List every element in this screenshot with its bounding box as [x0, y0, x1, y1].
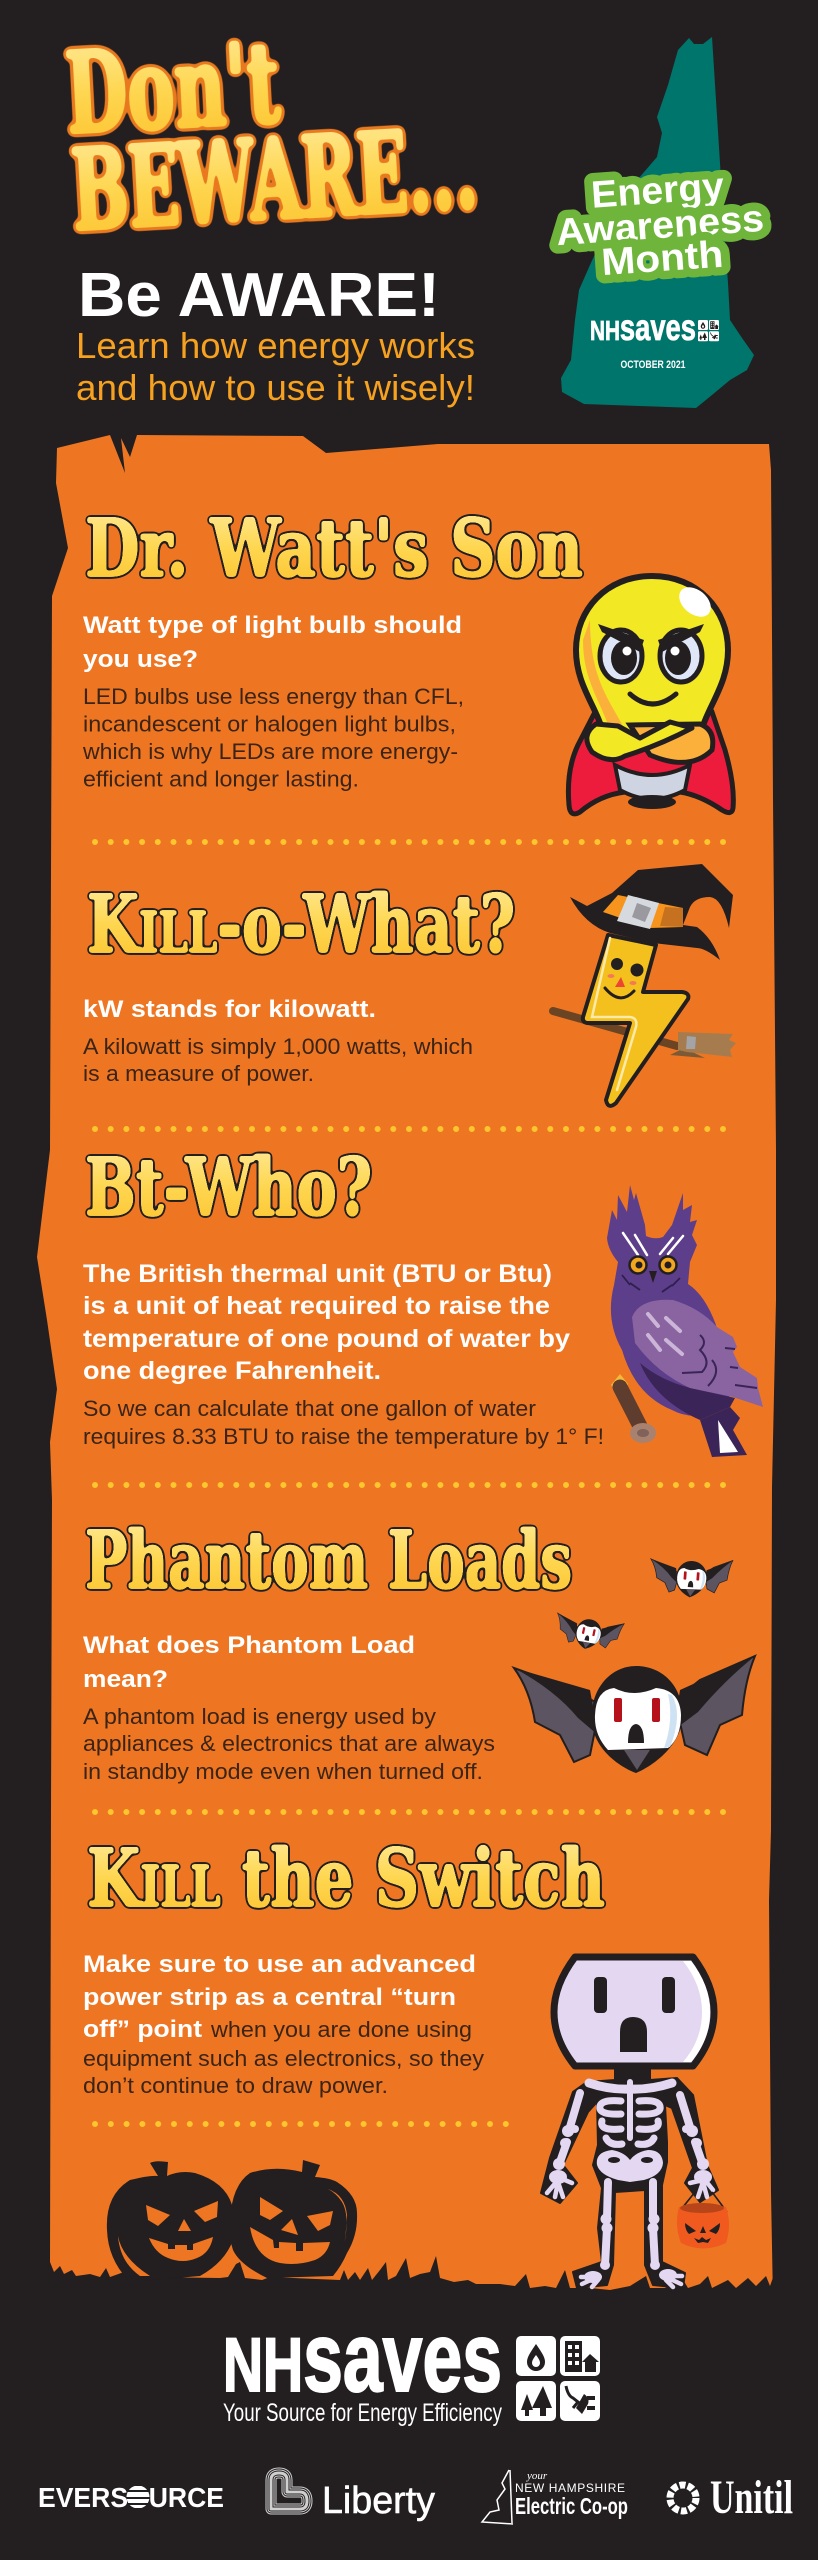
- title: Don't Beware: [63, 18, 481, 257]
- definition: one degree Fahrenheit.: [83, 1357, 381, 1385]
- heading: Phantom Loads: [85, 1513, 572, 1607]
- map: New Hampshire badge: [552, 37, 768, 408]
- section 3: Bt-Who?: [83, 1140, 763, 1457]
- advice: [83, 1951, 476, 2043]
- question: Watt type of light bulb should: [83, 612, 462, 639]
- black body: [541, 2066, 718, 2288]
- advice detail: equipment such as electronics, so they: [83, 2046, 484, 2071]
- liberty mark: [271, 2473, 307, 2509]
- icon: purple owl: [607, 1185, 763, 1457]
- left pumpkin: [107, 2161, 233, 2282]
- treat pail: [677, 2192, 729, 2248]
- date: OCTOBER 2021: [620, 359, 686, 371]
- answer: in standby mode even when turned off.: [83, 1759, 483, 1784]
- statement: kW stands for kilowatt.: [83, 996, 376, 1023]
- bone joints: [549, 2125, 712, 2283]
- logo: Unitil: [670, 2471, 793, 2524]
- energy awareness month label: Awareness: [555, 198, 765, 254]
- question: What does Phantom Load: [83, 1632, 415, 1659]
- logo: Eversource: [40, 2486, 223, 2508]
- definition: [83, 1260, 570, 1385]
- eversource wordmark: EVERSOURCE: [38, 2482, 224, 2513]
- icon: small bat right: [648, 1555, 733, 1600]
- advice: power strip as a central “turn: [83, 1984, 456, 2011]
- calculation: [83, 1396, 604, 1449]
- answer: [83, 1704, 495, 1784]
- answer: LED bulbs use less energy than CFL,: [83, 684, 464, 709]
- question: [83, 612, 462, 673]
- advice: Make sure to use an advanced: [83, 1951, 476, 1978]
- answer: A phantom load is energy used by: [83, 1704, 436, 1729]
- question: [83, 1632, 415, 1693]
- icon: large outlet bat: [514, 1656, 755, 1773]
- definition: temperature of one pound of water by: [83, 1325, 570, 1353]
- energy awareness month label: [552, 163, 768, 287]
- state outline: [482, 2470, 513, 2524]
- advice: off” point: [83, 2016, 202, 2043]
- question: mean?: [83, 1666, 168, 1693]
- grass silhouette: [46, 2256, 778, 2325]
- logo: NHsaves: [223, 2302, 600, 2427]
- outlet head: [554, 1957, 714, 2066]
- explanation: A kilowatt is simply 1,000 watts, which: [83, 1034, 473, 1059]
- heading: Kill-o-What?: [87, 877, 515, 971]
- answer: [82, 684, 464, 792]
- answer: efficient and longer lasting.: [83, 766, 359, 792]
- answer: incandescent or halogen light bulbs,: [83, 712, 456, 736]
- swirl mark: [670, 2485, 696, 2511]
- striped O: [126, 2486, 150, 2508]
- subtitle: and how to use it wisely!: [76, 367, 475, 408]
- advice detail: [83, 2017, 484, 2098]
- section 1: Dr. Watt's Son: [82, 501, 733, 814]
- answer: appliances & electronics that are always: [83, 1731, 495, 1756]
- title: Don't Beware: Don't: [63, 18, 283, 160]
- advice detail: don’t continue to draw power.: [83, 2073, 388, 2098]
- liberty wordmark: Liberty: [322, 2480, 435, 2522]
- subtitle: [76, 325, 475, 408]
- section 4: Phantom Loads: [83, 1513, 755, 1784]
- title: Don't Beware: BEWARE...: [68, 103, 481, 257]
- name line two: Electric Co-op: [515, 2493, 628, 2519]
- energy awareness month label: Energy: [590, 165, 725, 217]
- heading: Be AWARE!: Be AWARE!: [78, 261, 440, 330]
- calculation: So we can calculate that one gallon of water: [83, 1396, 536, 1421]
- script word: your: [526, 2470, 548, 2482]
- name line one: NEW HAMPSHIRE: [515, 2481, 625, 2495]
- definition: is a unit of heat required to raise the: [83, 1292, 550, 1320]
- heading: Kill the Switch: [87, 1831, 605, 1925]
- explanation: [83, 1034, 473, 1086]
- icon: jack-o-lanterns: [107, 2160, 357, 2282]
- answer: which is why LEDs are more energy-: [82, 739, 458, 764]
- logo: New Hampshire Electric Co-op: [482, 2470, 628, 2524]
- heading: Bt-Who?: [85, 1140, 372, 1234]
- icon: witch lightning bolt: [553, 864, 736, 1106]
- logo: Liberty: [271, 2473, 435, 2522]
- wordmark: NHsaves: [223, 2302, 502, 2412]
- explanation: is a measure of power.: [83, 1061, 314, 1086]
- small NHsaves logo: NHsaves: [590, 307, 696, 348]
- panel: orange parchment: [37, 435, 776, 2300]
- section 2: Kill-o-What?: [83, 864, 736, 1106]
- right pumpkin: [229, 2160, 357, 2278]
- definition: The British thermal unit (BTU or Btu): [83, 1260, 552, 1288]
- state shape: [561, 37, 754, 408]
- energy awareness month label: Month: [600, 234, 725, 284]
- bones: [547, 2082, 713, 2287]
- heading: Dr. Watt's Son: [85, 501, 583, 595]
- icon: vampire light bulb: [568, 576, 733, 814]
- icon: outlet-head skeleton: [541, 1957, 729, 2288]
- icon grid: [516, 2336, 600, 2421]
- section 5: Kill the Switch: [83, 1831, 605, 2098]
- icon: small bat left: [551, 1610, 624, 1656]
- question: you use?: [83, 646, 198, 673]
- small icon grid: [698, 320, 719, 341]
- calculation: requires 8.33 BTU to raise the temperature by 1° F!: [83, 1424, 604, 1449]
- advice detail: when you are done using: [210, 2017, 472, 2042]
- tagline: Your Source for Energy Efficiency: [223, 2399, 502, 2427]
- subtitle: Learn how energy works: [76, 325, 475, 366]
